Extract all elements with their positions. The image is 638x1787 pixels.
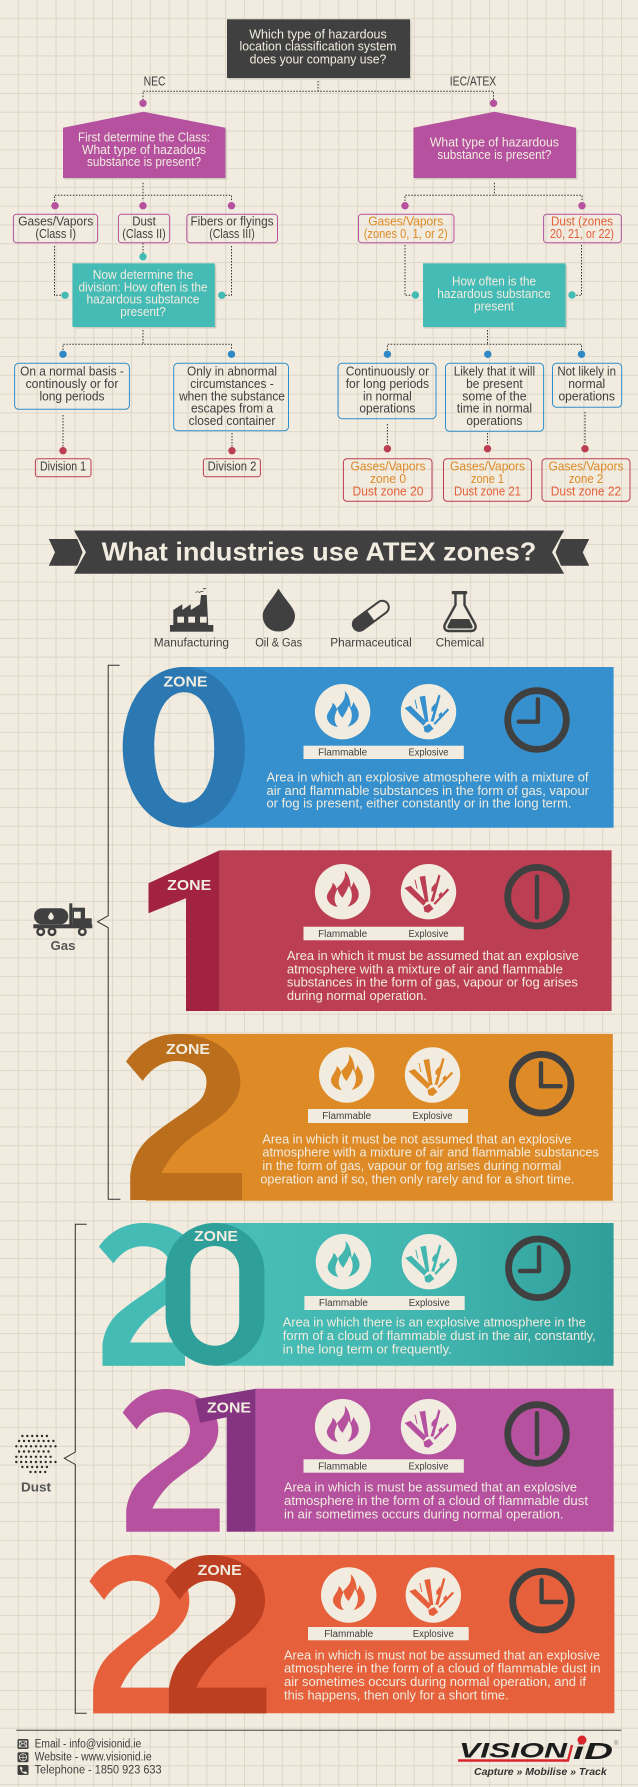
description: atmosphere in the form of a cloud of flammable dust (284, 1494, 589, 1508)
IEC frequency boxes: operations (359, 402, 415, 416)
hazard labels: Explosive (409, 1298, 450, 1309)
IEC frequency question: How often is the (452, 275, 536, 289)
numeral 2 (123, 1389, 220, 1532)
IEC frequency boxes: Not likely in (557, 365, 616, 379)
icon: clock (512, 1054, 571, 1113)
description: atmosphere with a mixture of air and flammable substances (262, 1146, 599, 1160)
description: air sometimes occurs during normal operation, and if (284, 1675, 587, 1689)
branch label: IEC/ATEX: IEC/ATEX (450, 75, 497, 89)
top question box: does your company use? (250, 52, 386, 66)
logo: Vision iD: VISION (459, 1740, 568, 1762)
icon: clock (509, 1239, 567, 1298)
icon: flammable (315, 1399, 370, 1454)
contact: website: Website - www.visionid.ie (35, 1751, 152, 1763)
numeral 1 with flag (195, 1389, 256, 1532)
description (287, 949, 579, 1003)
icon: dust particles (16, 1436, 57, 1472)
zone result boxes: Gases/Vapors (350, 460, 426, 474)
label: Manufacturing: Manufacturing (154, 638, 229, 650)
division result boxes: Division 1 (40, 460, 86, 474)
description (283, 1316, 596, 1356)
class boxes: (Class I) (35, 227, 76, 241)
description (266, 771, 589, 811)
top question box (227, 19, 412, 80)
description: form of a cloud of flammable dust in the air, constantly, (283, 1329, 596, 1343)
icon: factory (170, 588, 213, 632)
label: Chemical: Chemical (436, 638, 484, 650)
panel: zone 0 (123, 667, 614, 828)
NEC frequency boxes: closed container (189, 414, 275, 428)
zone label: ZONE (164, 674, 208, 691)
zone group boxes (358, 214, 621, 243)
hazard labels: Flammable (322, 1111, 372, 1122)
icon: clock (508, 867, 566, 926)
numeral 2 light (90, 1555, 191, 1713)
class boxes: Dust (132, 215, 156, 229)
hazard labels: Explosive (408, 929, 449, 940)
hazard labels: Explosive (408, 747, 449, 758)
IEC frequency boxes: normal (568, 377, 605, 391)
zone group boxes: 20, 21, or 22) (550, 227, 614, 241)
bracket: gas zones (98, 665, 120, 1199)
class boxes: Fibers or flyings (190, 215, 274, 229)
icon: capsule (349, 597, 393, 635)
hazard labels (304, 1459, 464, 1473)
description: Area in which an explosive atmosphere with a mixture of (266, 771, 589, 785)
NEC class question (63, 112, 227, 180)
description (260, 1133, 599, 1186)
zone label: ZONE (167, 877, 211, 894)
connector dots: red (59, 445, 589, 454)
branch label: NEC: NEC (144, 75, 166, 89)
icon: telephone (18, 1765, 28, 1775)
connector dots: purple (51, 100, 586, 209)
hazard labels (308, 1627, 469, 1640)
description: or fog is present, either constantly or in the long term. (266, 797, 572, 811)
division result boxes (35, 459, 260, 477)
logo: Vision iD: iD (573, 1738, 613, 1764)
panel: zone 21 (123, 1389, 614, 1532)
numeral 2 (126, 1034, 242, 1200)
description: during normal operation. (287, 989, 427, 1003)
IEC frequency boxes: operations (558, 389, 615, 403)
top question box: Which type of hazardous (249, 27, 387, 41)
description: Area in which it must be assumed that an explosive (287, 949, 579, 963)
zone result boxes (343, 459, 630, 501)
logo: Vision iD (458, 1736, 619, 1778)
description: in the long term or frequently. (283, 1342, 452, 1356)
description: Area in which is must be assumed that an explosive (284, 1481, 577, 1495)
panel: zone 20 (99, 1223, 614, 1366)
hazard labels: Explosive (413, 1629, 454, 1640)
connector dots: blue (59, 351, 585, 358)
zone result boxes: Dust zone 20 (352, 484, 424, 498)
NEC frequency boxes: escapes from a (191, 402, 273, 416)
zone result boxes: Gases/Vapors (548, 460, 624, 474)
description: in air sometimes occurs during normal operation. (284, 1507, 564, 1521)
NEC frequency boxes (15, 363, 288, 431)
contact: email: Email - info@visionid.ie (35, 1738, 141, 1750)
icon: clock (508, 1405, 566, 1463)
logo: Vision iD: ® (614, 1740, 619, 1747)
zone label: ZONE (194, 1228, 238, 1245)
icon: explosive (406, 1567, 461, 1623)
numeral 2 (98, 1223, 185, 1366)
icon: flammable (315, 684, 370, 739)
zone label: ZONE (166, 1041, 210, 1058)
contact: telephone: Telephone - 1850 923 633 (35, 1764, 162, 1776)
panel background (256, 1389, 614, 1532)
hazard labels (304, 746, 464, 759)
description (284, 1648, 601, 1702)
icon: explosive (402, 1234, 457, 1289)
zone result boxes: zone 1 (471, 472, 504, 486)
hazard labels: Flammable (318, 1461, 368, 1472)
IEC frequency boxes: be present (466, 377, 523, 391)
description: atmosphere in the form of a cloud of flammable dust in (284, 1662, 601, 1676)
NEC division question: Now determine the (93, 268, 193, 282)
zone group boxes: Dust (zones (551, 215, 613, 229)
numeral 1 (148, 850, 220, 1011)
NEC frequency boxes: Only in abnormal (187, 365, 277, 379)
heading banner: What industries use ATEX zones? (102, 537, 536, 567)
panel background (184, 667, 614, 828)
zone result boxes: zone 0 (370, 472, 406, 486)
hazard labels: Flammable (319, 1298, 368, 1309)
IEC substance question (413, 112, 578, 180)
icon: explosive (401, 1399, 456, 1454)
NEC division question: hazardous substance (86, 293, 200, 307)
icon: clock (508, 691, 566, 749)
icon: flask (444, 591, 476, 631)
IEC frequency question (423, 263, 567, 328)
icon: flammable (315, 864, 370, 919)
zone group boxes: (zones 0, 1, or 2) (364, 227, 448, 241)
label: Oil & Gas: Oil & Gas (255, 638, 302, 650)
panel background (215, 1223, 614, 1366)
NEC frequency boxes: circumstances - (190, 377, 274, 391)
top question box: location classification system (240, 40, 396, 54)
icon: flammable (319, 1047, 374, 1103)
icon: oil drop (263, 588, 295, 632)
IEC frequency boxes: Likely that it will (454, 365, 535, 379)
hazard labels: Flammable (318, 747, 368, 758)
panel background (220, 850, 612, 1011)
class boxes: (Class III) (209, 227, 255, 241)
class boxes: Gases/Vapors (18, 215, 93, 229)
class boxes (13, 214, 278, 243)
icon: flammable (321, 1567, 376, 1623)
flowchart: hazardous location classification (13, 19, 630, 501)
IEC substance question: substance is present? (437, 148, 551, 162)
IEC frequency boxes (338, 363, 622, 431)
hazard labels: Flammable (318, 929, 368, 940)
icon: gas tanker truck (33, 903, 92, 936)
industries row (154, 588, 484, 650)
hazard labels (308, 1109, 468, 1123)
icon: explosive (401, 684, 456, 739)
icon: website (18, 1752, 28, 1762)
description: operation and if so, then only rarely and for a short time. (260, 1172, 574, 1186)
NEC class question: substance is present? (87, 155, 201, 169)
NEC frequency boxes: long periods (40, 389, 104, 403)
IEC frequency boxes: Continuously or (346, 365, 429, 379)
IEC frequency question: hazardous substance (437, 287, 551, 301)
connector dots: teal (61, 253, 576, 299)
panel: zone 22 (90, 1555, 614, 1713)
connector lines (54, 78, 585, 447)
NEC division question (72, 263, 216, 328)
description (284, 1481, 589, 1521)
description: atmosphere with a mixture of air and flammable (287, 962, 563, 976)
description: Area in which it must be not assumed that an explosive (262, 1133, 571, 1147)
zone result boxes: Dust zone 22 (551, 484, 621, 498)
description: this happens, then only for a short time. (284, 1688, 509, 1702)
IEC frequency question: present (474, 299, 514, 313)
description: substances in the form of gas, vapour or fog arises (287, 976, 578, 990)
footer (16, 1730, 621, 1778)
IEC frequency boxes: some of the (462, 389, 527, 403)
description: air and flammable substances in the form of gas, vapour (266, 784, 589, 798)
NEC division question: division: How often is the (78, 280, 208, 294)
IEC frequency boxes: operations (466, 414, 522, 428)
IEC frequency boxes: time in normal (457, 402, 532, 416)
panel: zone 1 (148, 850, 612, 1011)
label: Dust: Dust (21, 1480, 52, 1495)
logo: Vision iD: Capture » Mobilise » Track (474, 1766, 608, 1778)
NEC class question: What type of hazadous (82, 143, 206, 157)
bracket: dust zones (64, 1224, 87, 1713)
icon: clock (513, 1571, 571, 1630)
IEC frequency boxes: in normal (363, 389, 412, 403)
zone label: ZONE (198, 1562, 242, 1579)
zone result boxes: Dust zone 21 (454, 484, 521, 498)
class boxes: (Class II) (122, 227, 166, 241)
zone result boxes: zone 2 (569, 472, 603, 486)
panel background (183, 1555, 614, 1713)
zone label: ZONE (207, 1399, 251, 1416)
label: Pharmaceutical: Pharmaceutical (330, 638, 412, 650)
IEC frequency boxes: for long periods (346, 377, 429, 391)
label: Gas: Gas (50, 938, 76, 953)
icon: explosive (401, 864, 456, 919)
zone group boxes: Gases/Vapors (368, 215, 443, 229)
description: Area in which is must not be assumed that an explosive (284, 1648, 600, 1662)
numeral 0 (123, 667, 245, 828)
icon: email (18, 1739, 28, 1749)
zone result boxes: Gases/Vapors (450, 460, 525, 474)
icon: explosive (405, 1047, 460, 1103)
panel: zone 2 (126, 1034, 613, 1201)
NEC division question: present? (120, 305, 166, 319)
heading banner (49, 530, 589, 574)
IEC substance question: What type of hazardous (430, 136, 559, 150)
hazard labels: Explosive (408, 1461, 449, 1472)
hazard labels: Flammable (324, 1629, 374, 1640)
NEC class question: First determine the Class: (78, 130, 210, 144)
hazard labels (304, 1296, 465, 1310)
NEC frequency boxes: when the substance (178, 389, 285, 403)
NEC frequency boxes: continously or for (26, 377, 118, 391)
panel background (146, 1034, 613, 1201)
hazard labels: Explosive (412, 1111, 453, 1122)
NEC frequency boxes: On a normal basis - (20, 365, 124, 379)
numeral 2 dark (165, 1555, 266, 1713)
icon: flammable (316, 1234, 371, 1289)
division result boxes: Division 2 (208, 460, 256, 474)
description: Area in which there is an explosive atmosphere in the (283, 1316, 586, 1330)
description: in the form of gas, vapour or fog arises during normal (262, 1159, 561, 1173)
hazard labels (304, 927, 464, 940)
numeral 0 (166, 1223, 264, 1366)
